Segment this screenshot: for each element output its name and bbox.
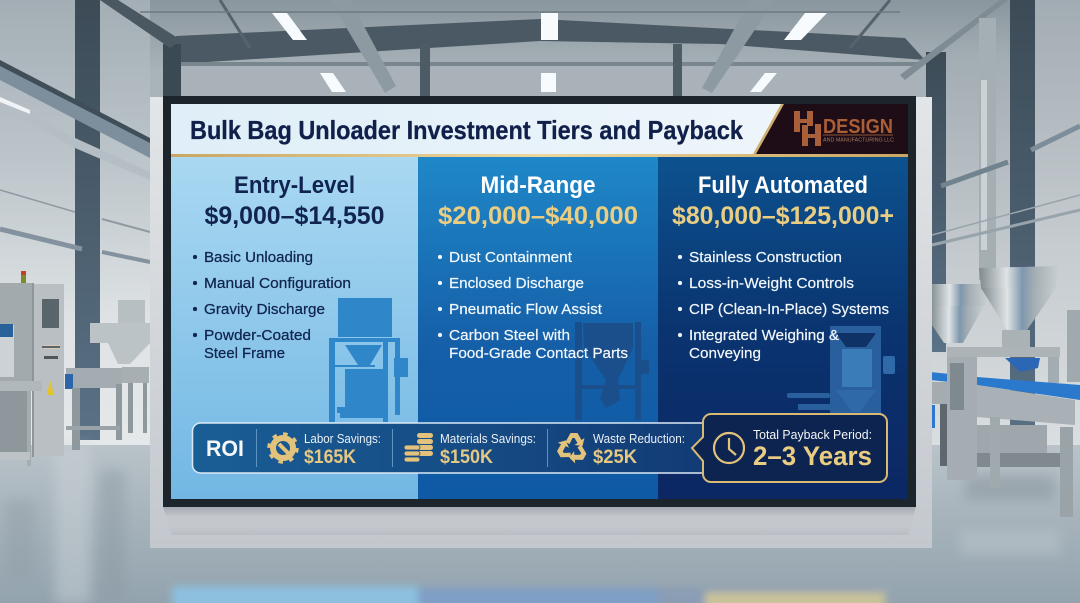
ROI bar	[192, 423, 722, 473]
icon: automated unloader	[787, 326, 895, 416]
labor savings: $165K	[304, 447, 356, 468]
feature list	[438, 249, 628, 362]
feature list: Carbon Steel with	[449, 327, 570, 344]
heading: Mid-Range	[480, 172, 596, 199]
conveyor	[930, 372, 950, 382]
silver pipe	[979, 18, 996, 280]
price: $9,000–$14,550	[204, 202, 384, 230]
feature list: Pneumatic Flow Assist	[449, 301, 603, 318]
right wall	[925, 55, 1015, 475]
feature list: Loss-in-Weight Controls	[689, 275, 854, 292]
feature list: CIP (Clean-In-Place) Systems	[689, 301, 889, 318]
lower frame	[977, 453, 1061, 467]
left columns	[75, 0, 100, 440]
feature list: Dust Containment	[449, 249, 573, 266]
feature list: Steel Frame	[204, 345, 285, 362]
logo: H&H mark	[794, 111, 821, 146]
materials savings: $150K	[440, 447, 493, 468]
header bar	[171, 104, 908, 154]
back wall beam	[176, 19, 925, 64]
feature list: Stainless Construction	[689, 249, 842, 266]
ceiling	[0, 0, 1080, 70]
frame	[1048, 357, 1059, 383]
callout: total payback period	[692, 414, 887, 482]
display screen frame	[163, 96, 916, 507]
feature list: Basic Unloading	[204, 249, 313, 266]
labor savings	[304, 432, 381, 468]
panel: mid-range	[418, 157, 658, 499]
floor	[0, 445, 1080, 603]
price: $20,000–$40,000	[438, 202, 638, 230]
left machinery	[0, 271, 150, 466]
waste reduction	[593, 432, 685, 468]
panel: entry-level	[171, 157, 418, 499]
logo: wordmark: AND MANUFACTURING LLC	[823, 138, 894, 144]
labor savings: Labor Savings:	[304, 432, 381, 446]
feature list	[193, 249, 351, 362]
back wall	[175, 64, 925, 100]
right machinery	[930, 266, 1080, 517]
conveyor and hopper behind	[118, 300, 145, 324]
feature list: Manual Configuration	[204, 275, 351, 292]
feature list	[678, 249, 889, 362]
icon: recycle	[554, 433, 589, 466]
hopper two	[979, 266, 1058, 288]
feature list: Enclosed Discharge	[449, 275, 584, 292]
icon: coins	[404, 433, 433, 462]
hopper one	[930, 284, 986, 306]
feature list: Gravity Discharge	[204, 301, 325, 318]
title: Bulk Bag Unloader Investment Tiers and Payback	[190, 115, 743, 145]
payback value: 2–3 Years	[753, 441, 872, 471]
left wall	[0, 0, 150, 460]
price: $80,000–$125,000+	[672, 202, 894, 230]
ceiling ducts	[330, 0, 396, 93]
materials savings: Materials Savings:	[440, 432, 536, 446]
icon: mid-range unloader	[575, 322, 649, 420]
floor reflection of the screen	[172, 586, 885, 603]
heading: Fully Automated	[698, 172, 868, 199]
backing wall panel	[150, 97, 932, 548]
left wall rail	[0, 60, 150, 158]
logo: wordmark: DESIGN	[823, 116, 893, 138]
cabinet	[0, 283, 33, 383]
right wall bars	[1031, 126, 1080, 150]
feature list: Conveying	[689, 345, 761, 362]
ceiling lights	[272, 13, 827, 92]
feature list: Food-Grade Contact Parts	[449, 345, 628, 362]
logo panel	[753, 104, 908, 154]
waste reduction: Waste Reduction:	[593, 432, 685, 446]
bench	[0, 325, 14, 377]
materials savings	[440, 432, 536, 468]
icon: clock	[714, 433, 744, 463]
heading: Entry-Level	[234, 172, 355, 199]
icon: gear and wrench	[269, 434, 297, 462]
feature list: Integrated Weighing &	[689, 327, 839, 344]
ROI label: ROI	[206, 436, 244, 461]
vertical back posts	[420, 44, 430, 98]
panel: fully automated	[658, 157, 908, 499]
icon: entry-level unloader	[329, 298, 408, 422]
gold header rule	[171, 154, 908, 157]
right columns	[926, 52, 946, 352]
feature list: Powder-Coated	[204, 327, 311, 344]
payback label: Total Payback Period:	[753, 427, 872, 442]
waste reduction: $25K	[593, 447, 637, 468]
